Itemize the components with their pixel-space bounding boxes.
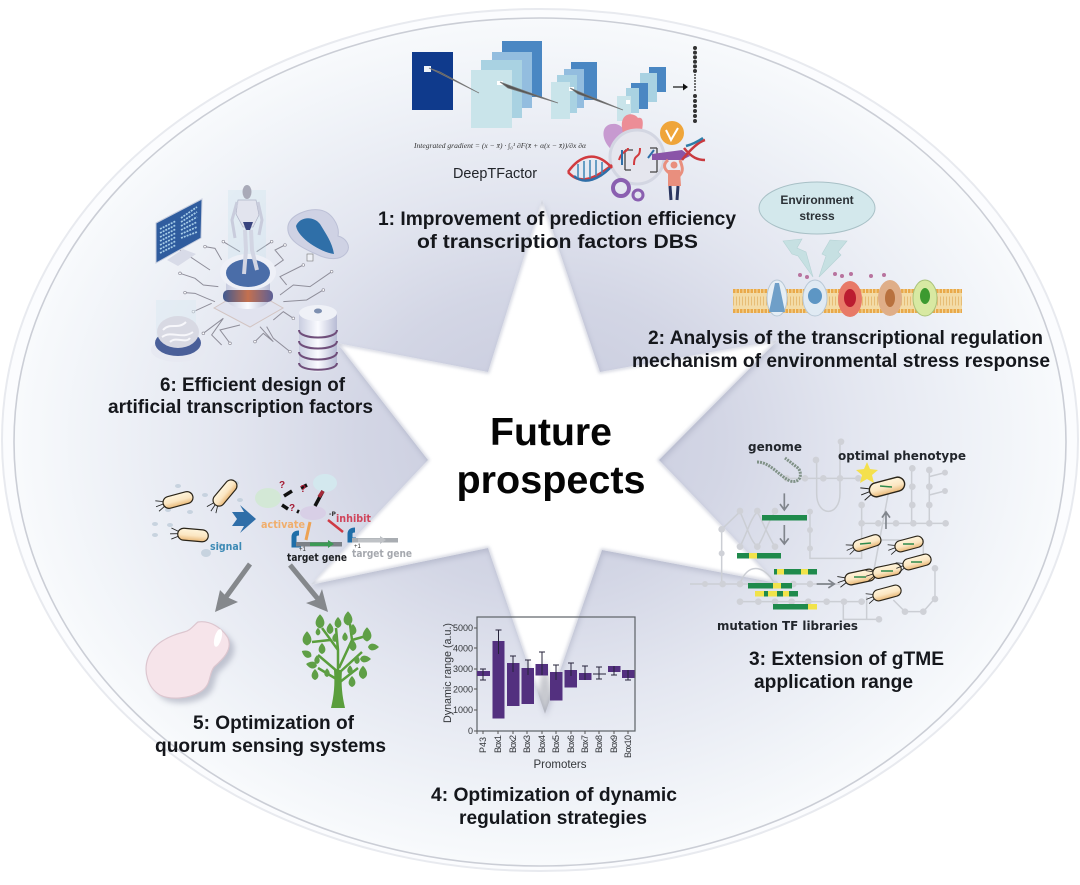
heading 3: 3: Extension of gTME	[749, 649, 944, 670]
chart axis labels: Box2	[508, 735, 518, 753]
heading 4	[431, 785, 677, 829]
chart axis labels: Box3	[522, 735, 532, 753]
chart axis labels: Promoters	[533, 759, 587, 771]
circuit traces	[179, 240, 333, 353]
title: Future prospects	[456, 411, 646, 502]
icon: database	[299, 305, 337, 372]
chart axis labels: Box6	[566, 735, 576, 753]
icon: DNA analysis illustration	[568, 114, 705, 200]
labels: activate and inhibit: inhibit	[336, 512, 371, 525]
heading 3: application range	[754, 672, 913, 693]
chart axis labels: Dynamic range (a.u.)	[442, 623, 454, 723]
icon: bacteria	[154, 477, 239, 542]
diagram labels: optimal phenotype	[838, 448, 966, 463]
icon: yellow star	[856, 462, 878, 483]
chart axis labels: Box1	[493, 735, 503, 753]
panel 3: gTME	[690, 438, 966, 693]
regulatory proteins	[255, 474, 337, 520]
icon: engineered bacteria	[836, 476, 932, 604]
molecules	[798, 272, 886, 279]
title: Future prospects: prospects	[456, 459, 646, 502]
arrow: signal block arrow	[232, 505, 256, 533]
diagram labels: genome	[748, 439, 802, 454]
chart axis labels: Box4	[537, 735, 547, 753]
heading 5	[155, 713, 386, 757]
central six-point star	[310, 199, 779, 717]
chart axis labels: 4000	[453, 644, 473, 654]
illustration: convolutional network layers	[412, 41, 695, 128]
bar chart frame and bars	[474, 617, 635, 734]
metabolic network background	[690, 438, 949, 623]
formula: integrated gradient: Integrated gradient = (x − x̄) · ∫₀¹ ∂F(x̄ + α(x − x̄))/∂x ∂α	[413, 142, 586, 150]
signal molecules	[152, 481, 243, 557]
callout: Environment stress: stress	[799, 209, 835, 223]
callout: Environment stress: Environment	[780, 193, 854, 207]
panel 5: quorum sensing	[146, 474, 412, 757]
icon: pink cell	[146, 622, 234, 703]
chart axis labels: 3000	[453, 664, 473, 674]
heading 2: 2: Analysis of the transcriptional regulation	[648, 328, 1043, 349]
labels: activate and inhibit: activate	[261, 518, 305, 531]
chart axis labels: 0	[468, 726, 473, 736]
heading 4: regulation strategies	[459, 808, 647, 829]
arrows: genome to libraries	[780, 493, 890, 588]
diagram labels	[717, 439, 966, 633]
icon: cloud	[288, 210, 348, 261]
heading 1	[378, 209, 736, 253]
label: DeepTFactor: DeepTFactor	[453, 166, 537, 182]
panel 2: environmental stress	[632, 182, 1050, 372]
heading 2: mechanism of environmental stress response	[632, 351, 1050, 372]
mutation TF bars	[737, 515, 817, 610]
icon: lipid membrane with channels	[733, 280, 962, 317]
gene regulation diagram	[287, 520, 412, 564]
heading 3	[749, 649, 944, 693]
heading 1: 1: Improvement of prediction efficiency	[378, 209, 736, 230]
chart axis labels: 2000	[453, 684, 473, 694]
regulatory proteins: ?	[300, 484, 306, 495]
chart axis labels: Box9	[609, 735, 619, 753]
icon: genome coil	[757, 458, 800, 481]
heading 2	[632, 328, 1050, 372]
panel 1: DeepTFactor prediction	[378, 41, 736, 253]
chart axis labels: P43	[478, 737, 488, 753]
chart axis labels: 5000	[453, 623, 473, 633]
icon: green tree	[300, 611, 379, 708]
chart axis labels: Box8	[594, 735, 604, 753]
regulatory proteins: ?	[289, 503, 295, 514]
chart axis labels: Box10	[623, 735, 633, 758]
chart axis labels: 1000	[453, 705, 473, 715]
gene regulation diagram: +1	[354, 544, 362, 550]
callout: Environment stress	[759, 182, 875, 234]
regulatory proteins: ?	[279, 480, 285, 491]
heading 5: quorum sensing systems	[155, 736, 386, 757]
title: Future prospects: Future	[490, 411, 612, 454]
gene regulation diagram: target gene	[287, 551, 347, 564]
chart axis labels	[442, 623, 633, 771]
heading 6: artificial transcription factors	[108, 397, 373, 418]
panel 4: dynamic range bar chart	[431, 617, 677, 829]
labels: activate and inhibit	[261, 511, 371, 531]
label: signal: signal	[210, 541, 242, 553]
heading 1: of transcription factors DBS	[417, 232, 698, 253]
arrows: outcome arrows	[215, 564, 328, 612]
chart axis labels: Box7	[580, 735, 590, 753]
icon: robot on pedestal	[214, 185, 283, 327]
diagram labels: mutation TF libraries	[717, 618, 858, 633]
chart axis labels: Box5	[551, 735, 561, 753]
icon: lightning bolts	[783, 239, 847, 277]
heading 4: 4: Optimization of dynamic	[431, 785, 677, 806]
gene regulation diagram: +1	[299, 547, 307, 553]
icon: monitor	[156, 199, 202, 266]
heading 6	[108, 375, 373, 418]
panel 6: artificial transcription factors	[108, 185, 373, 418]
icon: brain dome	[151, 300, 205, 362]
heading 5: 5: Optimization of	[193, 713, 355, 734]
gene regulation diagram: target gene	[352, 547, 412, 560]
labels: activate and inhibit: -P	[329, 511, 336, 518]
heading 6: 6: Efficient design of	[160, 375, 346, 396]
